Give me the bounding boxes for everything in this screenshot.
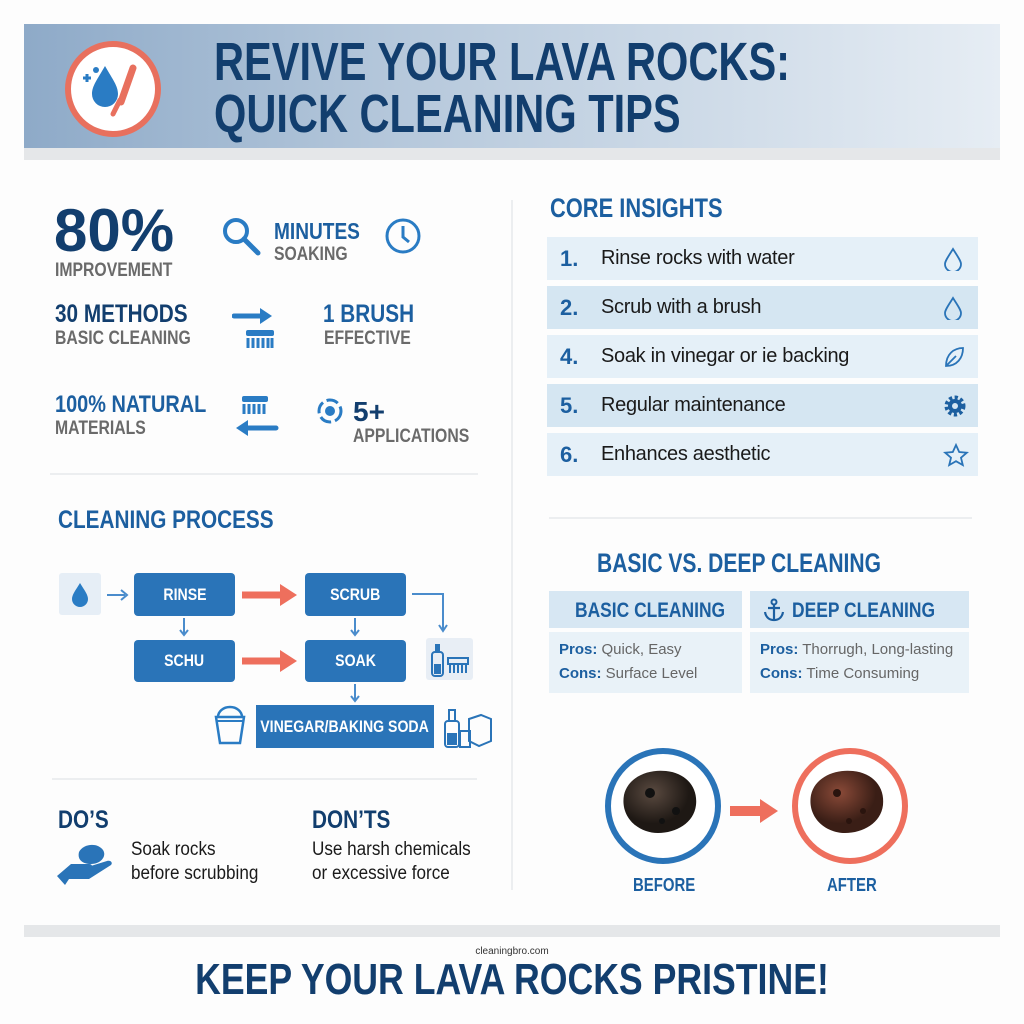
step soak [305,640,406,682]
stats panel: EFFECTIVE [324,328,411,349]
cleaning process panel [58,506,492,748]
do's: before scrubbing [131,863,258,884]
stats panel: SOAKING [274,244,348,265]
row 5 [547,433,978,476]
don'ts: DON’TS [312,806,390,834]
deep column: Pros: Thorrugh, Long-lasting [760,641,953,658]
title [214,32,790,144]
stat 5+: 5+ [353,396,385,427]
row 1 [547,237,978,280]
heading: cleaning process: CLEANING PROCESS [58,506,274,534]
don'ts: or excessive force [312,863,450,884]
icon: clock [386,218,420,254]
don'ts [312,806,471,884]
arrow [242,584,297,606]
before/after illustration: BEFORE [633,875,695,895]
row 1: Rinse rocks with water [601,247,794,269]
before/after illustration [605,748,908,895]
before rock [605,748,721,864]
stat natural: 100% NATURAL [55,391,206,418]
row 1: 1. [560,246,578,271]
title: REVIVE YOUR LAVA ROCKS: [214,32,790,92]
icon: bottles box [444,709,492,748]
step rinse: RINSE [163,584,206,604]
row 2: 2. [560,295,578,320]
step scrub [305,573,406,616]
header banner [24,24,1000,148]
row 5: 6. [560,442,578,467]
step schu [134,640,235,682]
row 5: Enhances aesthetic [601,443,770,465]
row 4 [547,384,978,427]
footer tagline: KEEP YOUR LAVA ROCKS PRISTINE! [195,955,829,1004]
basic column: Pros: Quick, Easy [559,641,682,658]
arrow [242,650,297,672]
step schu: SCHU [165,651,204,670]
heading: basic vs deep: BASIC VS. DEEP CLEANING [597,548,881,578]
arrow [730,799,778,823]
step vinegar/baking soda: VINEGAR/BAKING SODA [261,716,429,736]
row 3: 4. [560,344,578,369]
deep column: DEEP CLEANING [792,599,935,622]
don'ts: Use harsh chemicals [312,839,471,860]
row 2: Scrub with a brush [601,296,761,318]
icon: water drop and brush [65,41,161,137]
stat 1 brush: 1 BRUSH [323,300,414,328]
icon: bucket [214,706,246,744]
icon: bottle brush [426,638,473,680]
stat 80%: 80% [54,197,174,264]
icon: drop box [59,573,101,615]
stats panel [54,197,469,447]
row 3: Soak in vinegar or ie backing [601,345,849,367]
deep column: Cons: Time Consuming [760,665,919,682]
row 4: 5. [560,393,578,418]
heading: core insights: CORE INSIGHTS [550,193,723,223]
step soak: SOAK [335,651,376,670]
before/after illustration: AFTER [827,875,877,895]
footer url: cleaningbro.com [475,946,549,957]
stats panel: APPLICATIONS [353,426,469,447]
basic column: BASIC CLEANING [575,599,725,622]
row 4: Regular maintenance [601,394,785,416]
step vinegar/baking soda [256,705,434,748]
stats panel: IMPROVEMENT [55,260,172,281]
insights list [547,237,978,476]
title: QUICK CLEANING TIPS [214,84,681,144]
basic column [549,591,742,693]
stats panel: BASIC CLEANING [55,328,191,349]
deep column [750,591,969,693]
icon: brush arrow [236,396,278,436]
icon: magnifier [223,218,260,256]
do's: DO’S [58,806,109,834]
stats panel: MATERIALS [55,418,146,439]
do's [57,806,258,885]
step scrub: SCRUB [330,584,381,604]
step rinse [134,573,235,616]
comparison table [549,591,969,693]
after rock [792,748,908,864]
basic column: Cons: Surface Level [559,665,697,682]
do's: Soak rocks [131,839,216,860]
icon: arrow brush [232,308,274,348]
icon: recycle globe [318,398,342,424]
row 2 [547,286,978,329]
stat 30 methods: 30 METHODS [55,300,188,328]
row 3 [547,335,978,378]
stat minutes: MINUTES [274,218,360,244]
icon: hand holding rock [57,844,112,885]
